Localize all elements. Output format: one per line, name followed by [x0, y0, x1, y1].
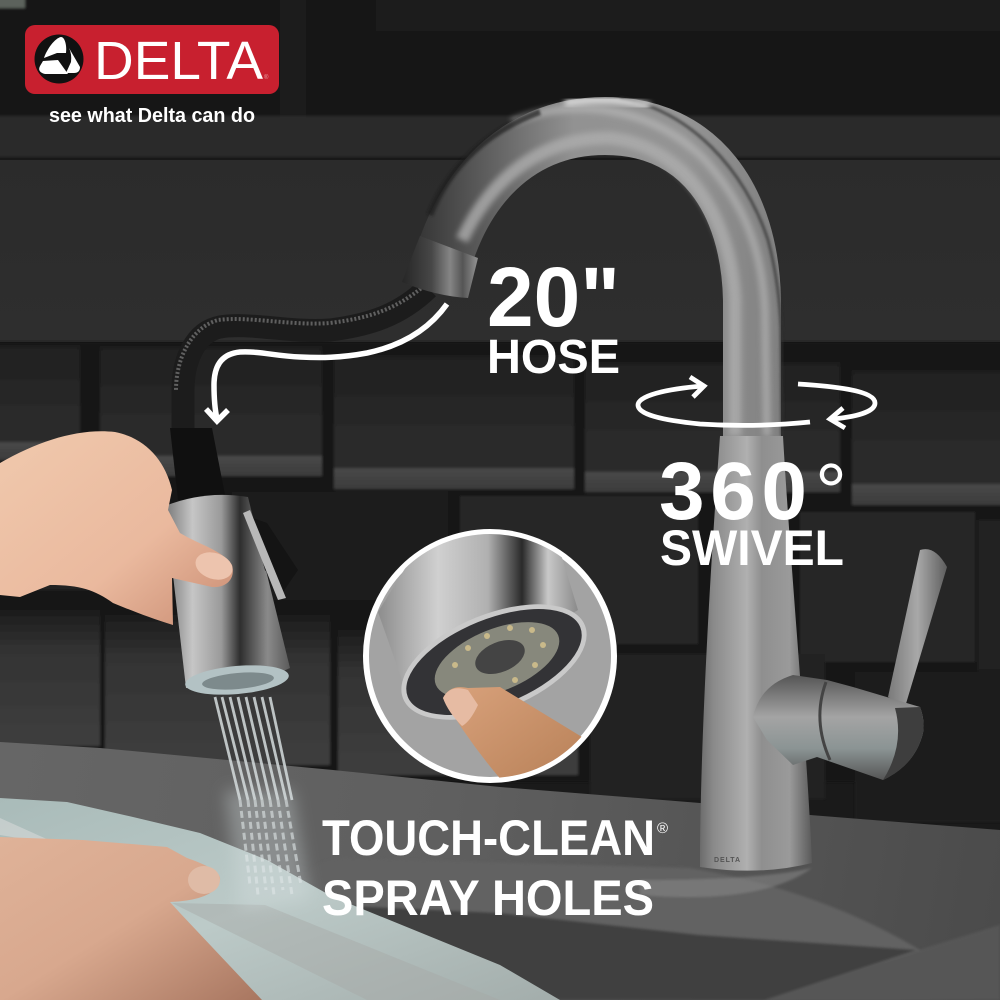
arrow: swivel rotation [638, 377, 875, 428]
faucet: base mark: DELTA [714, 857, 740, 864]
callout: 360 swivel: SWIVEL [660, 520, 844, 576]
logo wordmark: DELTA [94, 31, 263, 91]
callout: 360 swivel: 360 [659, 446, 807, 537]
callout: 360 swivel [659, 446, 847, 576]
fingernail [192, 548, 236, 584]
finger [443, 687, 582, 778]
callout: touch-clean spray holes: TOUCH-CLEAN [322, 810, 655, 866]
lower hand [0, 837, 262, 1000]
logo: Delta badge [25, 25, 279, 127]
tagline: see what Delta can do [49, 105, 255, 127]
wall panel [0, 160, 1000, 342]
logo registered mark: ® [264, 74, 269, 81]
nozzle body [378, 534, 578, 673]
icon: Delta triangle mark [34, 34, 84, 84]
countertop [0, 742, 1000, 1000]
spray head rim [184, 662, 290, 698]
spray head [165, 495, 298, 698]
sink [305, 858, 1000, 1000]
water mist [225, 790, 310, 910]
subway tile rows [0, 342, 1000, 822]
spout end [402, 236, 478, 298]
plate [0, 798, 560, 1000]
spray head trigger [250, 517, 298, 592]
spray connector [170, 428, 226, 500]
faucet: base [700, 436, 812, 871]
hose [176, 286, 428, 428]
arrow: hose [206, 304, 447, 421]
callout: 20 inch hose: HOSE [487, 331, 620, 384]
water spray [215, 697, 301, 895]
upper cabinet [0, 0, 1000, 160]
nozzle face [402, 604, 587, 720]
callout: 360 swivel: ° [815, 447, 847, 536]
faucet: gooseneck [402, 98, 782, 436]
faucet: lever [888, 549, 947, 707]
upper hand [0, 431, 236, 625]
inset: touch-clean circle [363, 525, 617, 790]
faucet: handle [753, 675, 924, 780]
callout: touch-clean spray holes: ® [657, 820, 668, 837]
callout: touch-clean spray holes [322, 810, 668, 926]
callout: 20 inch hose: 20" [487, 250, 620, 344]
lower fingernail [188, 866, 220, 894]
callout: touch-clean spray holes: SPRAY HOLES [322, 870, 654, 926]
